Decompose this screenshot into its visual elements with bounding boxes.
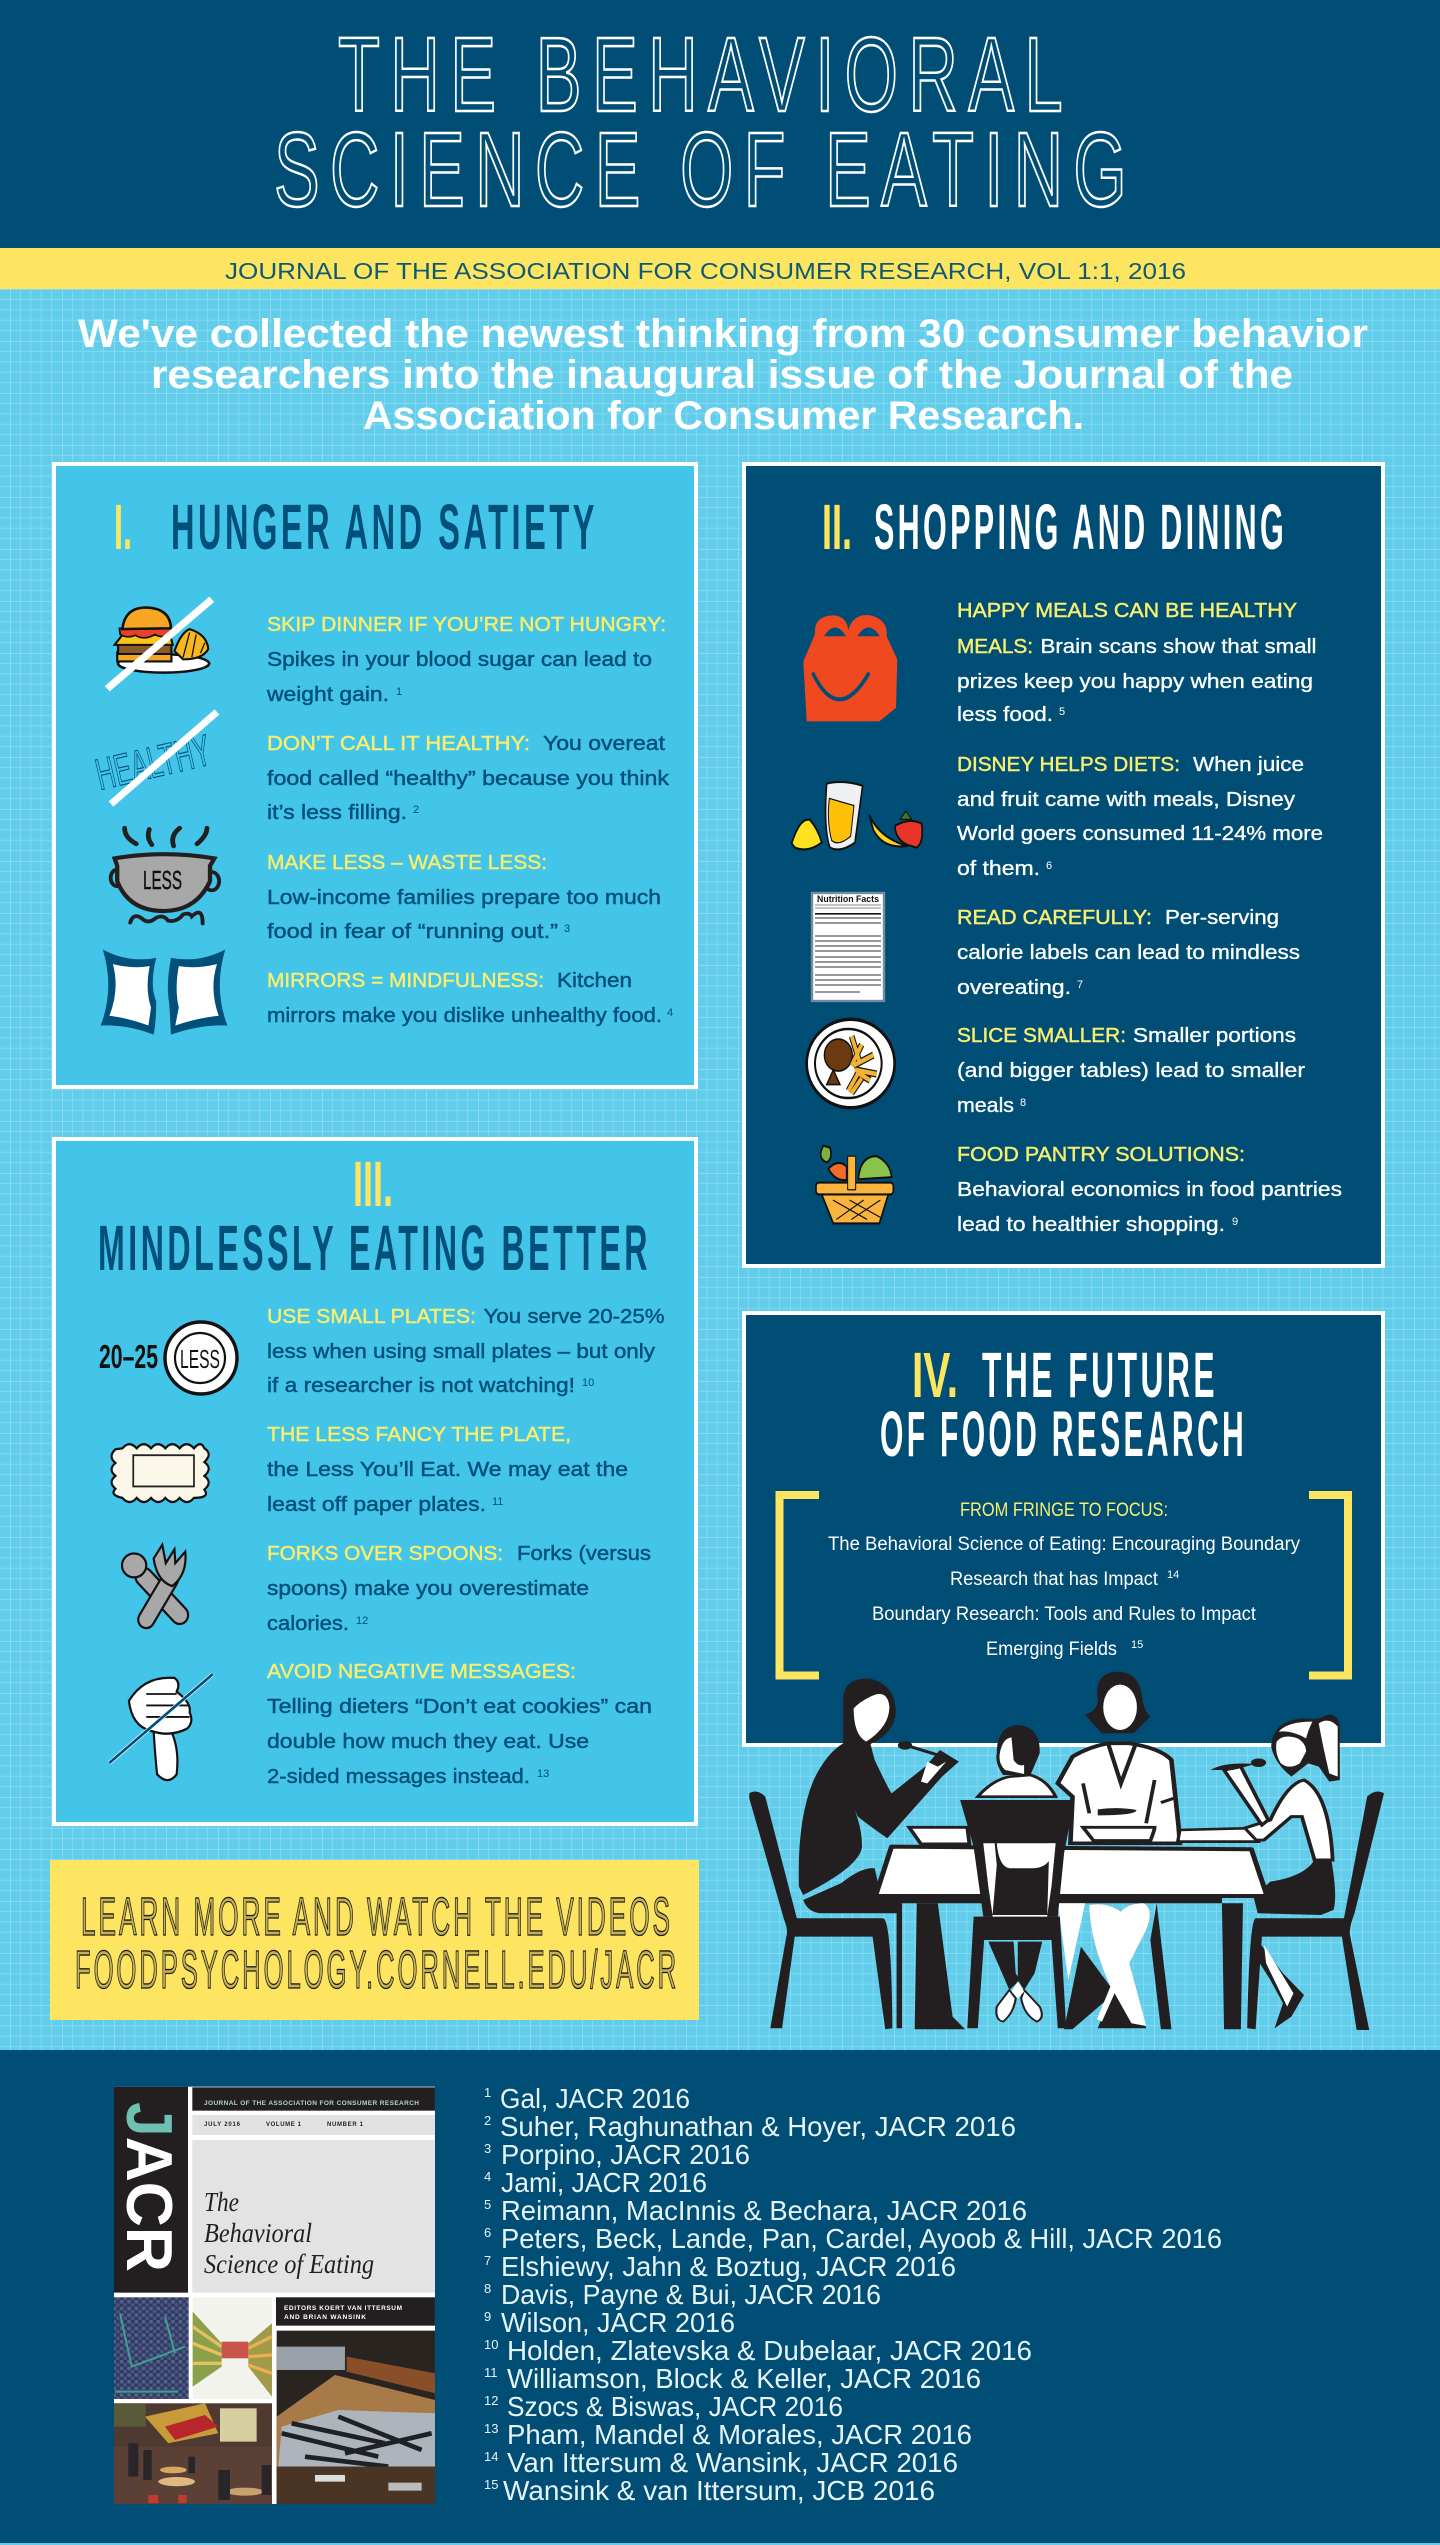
journal cover: J ACR: [113, 2102, 186, 2272]
heading: future of food research: [880, 1339, 1247, 1470]
text block: avoid negative messages: 13: [537, 1768, 549, 1780]
text block: mirrors mindfulness: [267, 969, 673, 1027]
heading: hunger and satiety: I.: [114, 491, 132, 563]
icon: cooking pot labelled less: [111, 828, 219, 923]
journal cover: JOURNAL OF THE ASSOCIATION FOR CONSUMER RESEARCH: [204, 2100, 419, 2107]
references list: Elshiewy, Jahn & Boztug, JACR 2016: [501, 2251, 956, 2282]
text block: slice smaller: 8: [1020, 1097, 1026, 1109]
text block: forks over spoons: [267, 1542, 651, 1635]
text block: disney helps diets: DISNEY HELPS DIETS:: [957, 753, 1180, 776]
icon: kitchen mirrors: [101, 950, 227, 1035]
text block: don't call it healthy: DON’T CALL IT HEALTHY:: [267, 732, 530, 755]
text block: disney helps diets: [957, 753, 1323, 880]
heading: mindlessly eating better: [98, 1148, 651, 1284]
text block: mirrors mindfulness: Kitchen: [557, 969, 632, 992]
references list: 1: [484, 2085, 491, 2100]
references list: 7: [484, 2253, 491, 2268]
references list: 3: [484, 2141, 491, 2156]
references list: Jami, JACR 2016: [501, 2167, 707, 2198]
references list: 8: [484, 2281, 491, 2296]
references list: Williamson, Block & Keller, JACR 2016: [507, 2363, 981, 2394]
heading: mindlessly eating better: III.: [353, 1148, 393, 1220]
text block: mirrors mindfulness: 4: [667, 1007, 673, 1019]
text block: use small plates: [267, 1305, 665, 1397]
call to action: [50, 1860, 699, 2020]
text block: less fancy plate: 11: [492, 1496, 503, 1508]
icon: crossed-out healthy word: HEALTHY: [91, 726, 215, 800]
text block: make less waste less: Low-income families prepare too much: [267, 886, 661, 909]
text block: use small plates: if a researcher is not watching!: [267, 1374, 575, 1397]
journal cover: The: [204, 2187, 239, 2217]
text block: make less waste less: food in fear of “running out.”: [267, 920, 558, 943]
text block: don't call it healthy: 2: [413, 804, 419, 816]
journal cover: Science of Eating: [204, 2249, 374, 2279]
text block: skip dinner: 1: [396, 686, 402, 698]
girl: [1211, 1715, 1340, 2028]
text block: read carefully: 7: [1077, 979, 1083, 991]
background grid: [0, 289, 1440, 2059]
text block: from fringe to focus: The Behavioral Science of Eating: Encouraging Boundary: [828, 1534, 1300, 1555]
text block: from fringe to focus: Research that has Impact: [950, 1569, 1159, 1590]
icon: 20-25 less plate: LESS: [180, 1344, 220, 1374]
text block: happy meals: HAPPY MEALS CAN BE HEALTHY: [957, 599, 1297, 622]
icon: fork and spoon: [122, 1545, 186, 1620]
journal cover: [113, 2087, 435, 2504]
references list: 13: [484, 2421, 498, 2436]
text block: happy meals: prizes keep you happy when eating: [957, 670, 1313, 693]
text block: read carefully: READ CAREFULLY:: [957, 906, 1152, 929]
text block: happy meals: [957, 599, 1316, 726]
journal cover: NUMBER 1: [327, 2122, 364, 2128]
intro text: Association for Consumer Research.: [363, 394, 1084, 438]
text block: read carefully: Per-serving: [1165, 906, 1279, 929]
references list: Wilson, JACR 2016: [501, 2307, 735, 2338]
panel: III mindlessly eating better: [54, 1139, 696, 1824]
text block: from fringe to focus: Emerging Fields: [986, 1639, 1117, 1660]
text block: disney helps diets: 6: [1046, 860, 1052, 872]
references list: 9: [484, 2309, 491, 2324]
journal band: [0, 248, 1440, 289]
right bracket: [1309, 1495, 1348, 1676]
text block: make less waste less: MAKE LESS – WASTE LESS:: [267, 851, 547, 874]
left chair: [749, 1791, 892, 2029]
icon: 20-25 less plate: 20–25: [99, 1338, 158, 1375]
header banner: [0, 0, 1440, 248]
journal cover: VOLUME 1: [266, 2122, 302, 2128]
references list: Peters, Beck, Lande, Pan, Cardel, Ayoob & Hill, JACR 2016: [501, 2223, 1222, 2254]
references list: [484, 2083, 1222, 2506]
journal cover: Behavioral: [204, 2218, 312, 2248]
panel: II shopping and dining: [744, 464, 1383, 1266]
heading: shopping and dining: [822, 491, 1287, 563]
references list: Porpino, JACR 2016: [501, 2139, 750, 2170]
text block: less fancy plate: the Less You’ll Eat. We may eat the: [267, 1458, 628, 1481]
text block: from fringe to focus: FROM FRINGE TO FOCUS:: [960, 1500, 1168, 1521]
text block: food pantry solutions: Behavioral economics in food pantries: [957, 1178, 1342, 1201]
text block: disney helps diets: of them.: [957, 857, 1040, 880]
references list: Holden, Zlatevska & Dubelaar, JACR 2016: [507, 2335, 1032, 2366]
icon: juice and fruit: [792, 782, 922, 849]
icon: plate with chicken and fries: [807, 1019, 895, 1108]
icon: food basket: [816, 1146, 893, 1223]
text block: less fancy plate: least off paper plates.: [267, 1493, 486, 1516]
table legs: [897, 1896, 1243, 2029]
text block: make less waste less: 3: [564, 923, 570, 935]
text block: read carefully: calorie labels can lead to mindless: [957, 941, 1300, 964]
text block: use small plates: You serve 20-25%: [484, 1305, 665, 1328]
text block: mirrors mindfulness: MIRRORS = MINDFULNESS:: [267, 969, 544, 992]
text block: less fancy plate: [267, 1423, 628, 1516]
references list: Reimann, MacInnis & Bechara, JACR 2016: [501, 2195, 1027, 2226]
text block: happy meals: 5: [1059, 706, 1065, 718]
icon: crossed-out burger and fries: [107, 599, 212, 689]
heading: mindlessly eating better: MINDLESSLY EATING BETTER: [98, 1212, 651, 1284]
text block: avoid negative messages: 2-sided messages instead.: [267, 1765, 530, 1788]
intro text: researchers into the inaugural issue of the Journal of the: [151, 353, 1293, 397]
text block: food pantry solutions: 9: [1232, 1216, 1238, 1228]
text block: use small plates: 10: [582, 1377, 594, 1389]
text block: less fancy plate: THE LESS FANCY THE PLATE,: [267, 1423, 571, 1446]
text block: make less waste less: [267, 851, 661, 943]
references list: Van Ittersum & Wansink, JACR 2016: [507, 2447, 958, 2478]
text block: from fringe to focus: 15: [1131, 1639, 1143, 1651]
intro text: We've collected the newest thinking from 30 consumer behavior: [78, 312, 1368, 356]
icon: nutrition facts label: [812, 893, 884, 1001]
text block: happy meals: less food.: [957, 703, 1053, 726]
left bracket: [780, 1495, 819, 1676]
text block: avoid negative messages: Telling dieters “Don’t eat cookies” can: [267, 1695, 652, 1718]
text block: skip dinner: [266, 613, 666, 706]
woman: [1058, 1672, 1180, 2029]
references list: Davis, Payne & Bui, JACR 2016: [501, 2279, 881, 2310]
references list: 5: [484, 2197, 491, 2212]
references list: 6: [484, 2225, 491, 2240]
text: FOODPSYCHOLOGY.CORNELL.EDU/JACR: [75, 1940, 679, 2000]
references list: 15: [484, 2477, 498, 2492]
child on chair: [960, 1725, 1073, 2028]
text block: happy meals: Brain scans show that small: [1040, 635, 1316, 658]
text block: forks over spoons: Forks (versus: [517, 1542, 651, 1565]
text block: read carefully: overeating.: [957, 976, 1071, 999]
text block: happy meals: MEALS:: [957, 635, 1033, 658]
text block: skip dinner: Spikes in your blood sugar can lead to: [267, 648, 652, 671]
references list: 11: [484, 2365, 498, 2380]
icon: paper plate: [112, 1444, 209, 1502]
call to action: LEARN MORE AND WATCH THE VIDEOS: [81, 1887, 673, 1947]
right chair: [1247, 1791, 1384, 2030]
heading: hunger and satiety: [114, 491, 598, 563]
references list: 10: [484, 2337, 498, 2352]
text block: food pantry solutions: FOOD PANTRY SOLUTIONS:: [957, 1143, 1245, 1166]
text block: from fringe to focus: 14: [1167, 1569, 1179, 1581]
text block: don't call it healthy: it’s less filling.: [267, 801, 407, 824]
text block: from fringe to focus: Boundary Research: Tools and Rules to Impact: [872, 1604, 1257, 1625]
references list: Gal, JACR 2016: [500, 2083, 690, 2114]
heading: shopping and dining: II.: [822, 491, 852, 563]
text block: slice smaller: [957, 1024, 1305, 1117]
text block: disney helps diets: and fruit came with meals, Disney: [957, 788, 1296, 811]
text block: don't call it healthy: You overeat: [543, 732, 665, 755]
text block: avoid negative messages: AVOID NEGATIVE MESSAGES:: [267, 1660, 576, 1683]
references list: Pham, Mandel & Morales, JACR 2016: [507, 2419, 972, 2450]
text block: disney helps diets: World goers consumed 11-24% more: [957, 822, 1323, 845]
footer band: [0, 2050, 1440, 2543]
references list: Szocs & Biswas, JACR 2016: [507, 2391, 843, 2422]
dinner table top: [876, 1827, 1267, 1896]
journal band: JOURNAL OF THE ASSOCIATION FOR CONSUMER RESEARCH, VOL 1:1, 2016: [225, 258, 1186, 284]
text block: use small plates: USE SMALL PLATES:: [267, 1305, 476, 1328]
icon: 20-25 less plate: [99, 1322, 237, 1394]
heading: hunger and satiety: HUNGER AND SATIETY: [171, 491, 598, 563]
icon: crossed-out thumbs down: [109, 1674, 213, 1780]
intro text: [78, 312, 1368, 438]
text block: forks over spoons: 12: [356, 1615, 368, 1627]
text block: disney helps diets: When juice: [1193, 753, 1304, 776]
references list: Wansink & van Ittersum, JCB 2016: [503, 2475, 935, 2506]
text block: use small plates: less when using small plates – but only: [267, 1340, 656, 1363]
journal cover: EDITORS KOERT VAN ITTERSUM: [284, 2305, 402, 2312]
text block: food pantry solutions: [957, 1143, 1342, 1236]
text block: mirrors mindfulness: mirrors make you dislike unhealthy food.: [267, 1004, 662, 1027]
icon: happy meal box: [803, 615, 897, 721]
text block: slice smaller: meals: [957, 1094, 1014, 1117]
references list: 12: [484, 2393, 498, 2408]
panel: IV future of food research: [744, 1313, 1383, 1745]
text block: skip dinner: SKIP DINNER IF YOU’RE NOT HUNGRY:: [267, 613, 666, 636]
text block: avoid negative messages: double how much they eat. Use: [267, 1730, 589, 1753]
man: [799, 1678, 959, 1913]
heading: future of food research: IV.: [912, 1339, 958, 1411]
text block: from fringe to focus: [828, 1500, 1300, 1660]
icon: crossed-out healthy word: [91, 712, 217, 804]
illustration: family at dinner table: [749, 1672, 1384, 2030]
text block: slice smaller: Smaller portions: [1133, 1024, 1296, 1047]
text block: don't call it healthy: food called “healthy” because you think: [267, 767, 670, 790]
text block: don't call it healthy: [267, 732, 670, 824]
text block: skip dinner: weight gain.: [266, 683, 389, 706]
text block: read carefully: [957, 906, 1300, 999]
references list: 14: [484, 2449, 498, 2464]
text block: avoid negative messages: [267, 1660, 652, 1788]
icon: nutrition facts label: Nutrition Facts: [817, 894, 879, 905]
journal cover: AND BRIAN WANSINK: [284, 2314, 366, 2321]
text block: slice smaller: (and bigger tables) lead to smaller: [957, 1059, 1305, 1082]
icon: cooking pot labelled less: LESS: [143, 865, 182, 895]
text block: forks over spoons: calories.: [267, 1612, 349, 1635]
journal cover: JULY 2016: [204, 2122, 241, 2128]
references list: Suher, Raghunathan & Hoyer, JACR 2016: [500, 2111, 1016, 2142]
references list: 4: [484, 2169, 491, 2184]
references list: 2: [484, 2113, 491, 2128]
text block: slice smaller: SLICE SMALLER:: [957, 1024, 1126, 1047]
text block: food pantry solutions: lead to healthier shopping.: [957, 1213, 1225, 1236]
text block: forks over spoons: FORKS OVER SPOONS:: [267, 1542, 503, 1565]
title: THE BEHAVIORAL: [338, 16, 1073, 134]
title: [274, 16, 1137, 229]
text block: forks over spoons: spoons) make you overestimate: [267, 1577, 589, 1600]
panel: I hunger and satiety: [54, 464, 696, 1087]
